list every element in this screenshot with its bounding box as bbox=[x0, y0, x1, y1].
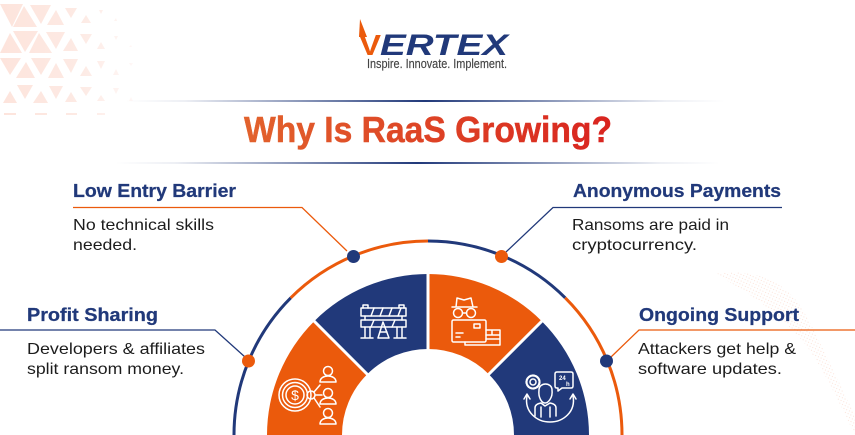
semicircle wheel bbox=[267, 270, 589, 435]
callout: profit sharing: Developers & affiliates bbox=[27, 341, 205, 358]
title: Why Is RaaS Growing? bbox=[244, 109, 612, 150]
icon: profit sharing bbox=[279, 366, 336, 424]
logo: Inspire. Innovate. Implement. bbox=[367, 57, 507, 71]
callout: low entry barrier bbox=[73, 181, 360, 263]
icon: anonymous hacker with cards bbox=[452, 298, 500, 345]
callout: anonymous payments: Ransoms are paid in bbox=[572, 217, 729, 234]
callout: low entry barrier: needed. bbox=[73, 237, 137, 254]
callout: ongoing support: Attackers get help & bbox=[638, 341, 796, 358]
callout: ongoing support: software updates. bbox=[638, 361, 782, 378]
icon: ongoing support: h bbox=[566, 382, 570, 388]
outer arc bbox=[234, 241, 622, 435]
callout: anonymous payments: Anonymous Payments bbox=[573, 181, 781, 201]
callout: anonymous payments bbox=[495, 181, 782, 263]
callout: profit sharing: Profit Sharing bbox=[27, 305, 158, 325]
icon: profit sharing: $ bbox=[291, 387, 299, 403]
icon: ongoing support bbox=[524, 372, 576, 422]
logo bbox=[359, 19, 511, 71]
icon: ongoing support: 24 bbox=[559, 376, 566, 382]
background triangle pattern bbox=[0, 4, 133, 115]
callout: ongoing support: Ongoing Support bbox=[639, 305, 799, 325]
icon: road barrier bbox=[361, 305, 406, 338]
callout: profit sharing bbox=[0, 305, 255, 378]
logo: V bbox=[359, 30, 382, 62]
callout: low entry barrier: No technical skills bbox=[73, 217, 214, 234]
logo: ERTEX bbox=[380, 29, 511, 62]
callout: low entry barrier: Low Entry Barrier bbox=[73, 181, 236, 201]
callout: anonymous payments: cryptocurrency. bbox=[572, 237, 697, 254]
callout: ongoing support bbox=[600, 305, 855, 378]
callout: profit sharing: split ransom money. bbox=[27, 361, 184, 378]
background dotted wave bbox=[715, 272, 855, 435]
